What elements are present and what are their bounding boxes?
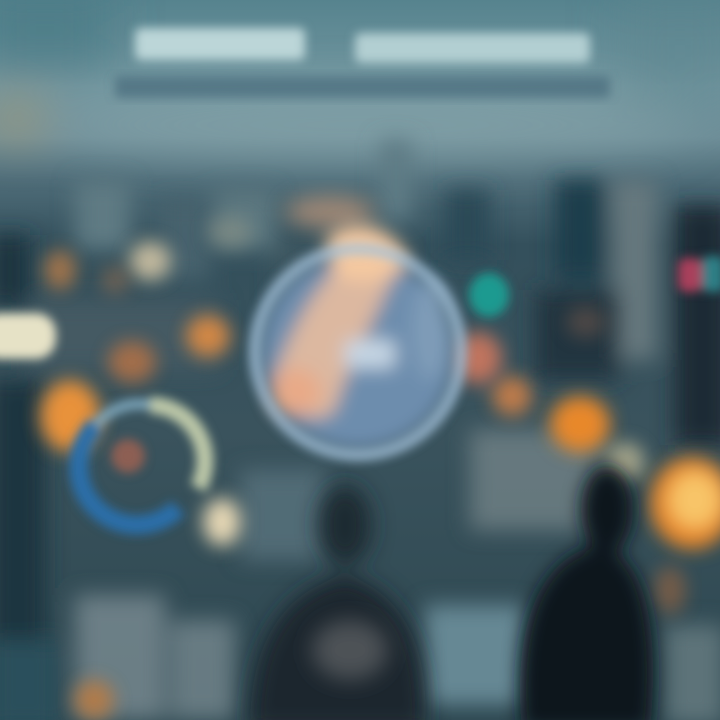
silhouette: person in the middle [250, 485, 426, 720]
city lights: orange glows [40, 196, 686, 720]
silhouette: person on the right [520, 466, 653, 720]
accent: magenta and teal light on right [678, 256, 720, 292]
highlight: cream light at left edge [0, 313, 56, 359]
highlight: cream light beside donut [203, 498, 241, 546]
silhouette detail: lighter torso [312, 620, 388, 680]
highlight: large orange light at right edge [650, 457, 720, 549]
pie chart ring [255, 249, 461, 455]
donut pale arc [150, 405, 205, 488]
subtitle: blurred dark band [115, 76, 610, 98]
chart: small donut [79, 404, 205, 525]
donut blue arc [79, 425, 178, 525]
pie chart fill [260, 225, 456, 450]
donut centre [111, 439, 145, 473]
sky haze [0, 0, 720, 160]
title: blurred heading bar [135, 28, 590, 63]
donut top arc [96, 404, 150, 425]
accent: teal light [469, 273, 509, 317]
chart: large circular pie [255, 225, 461, 455]
